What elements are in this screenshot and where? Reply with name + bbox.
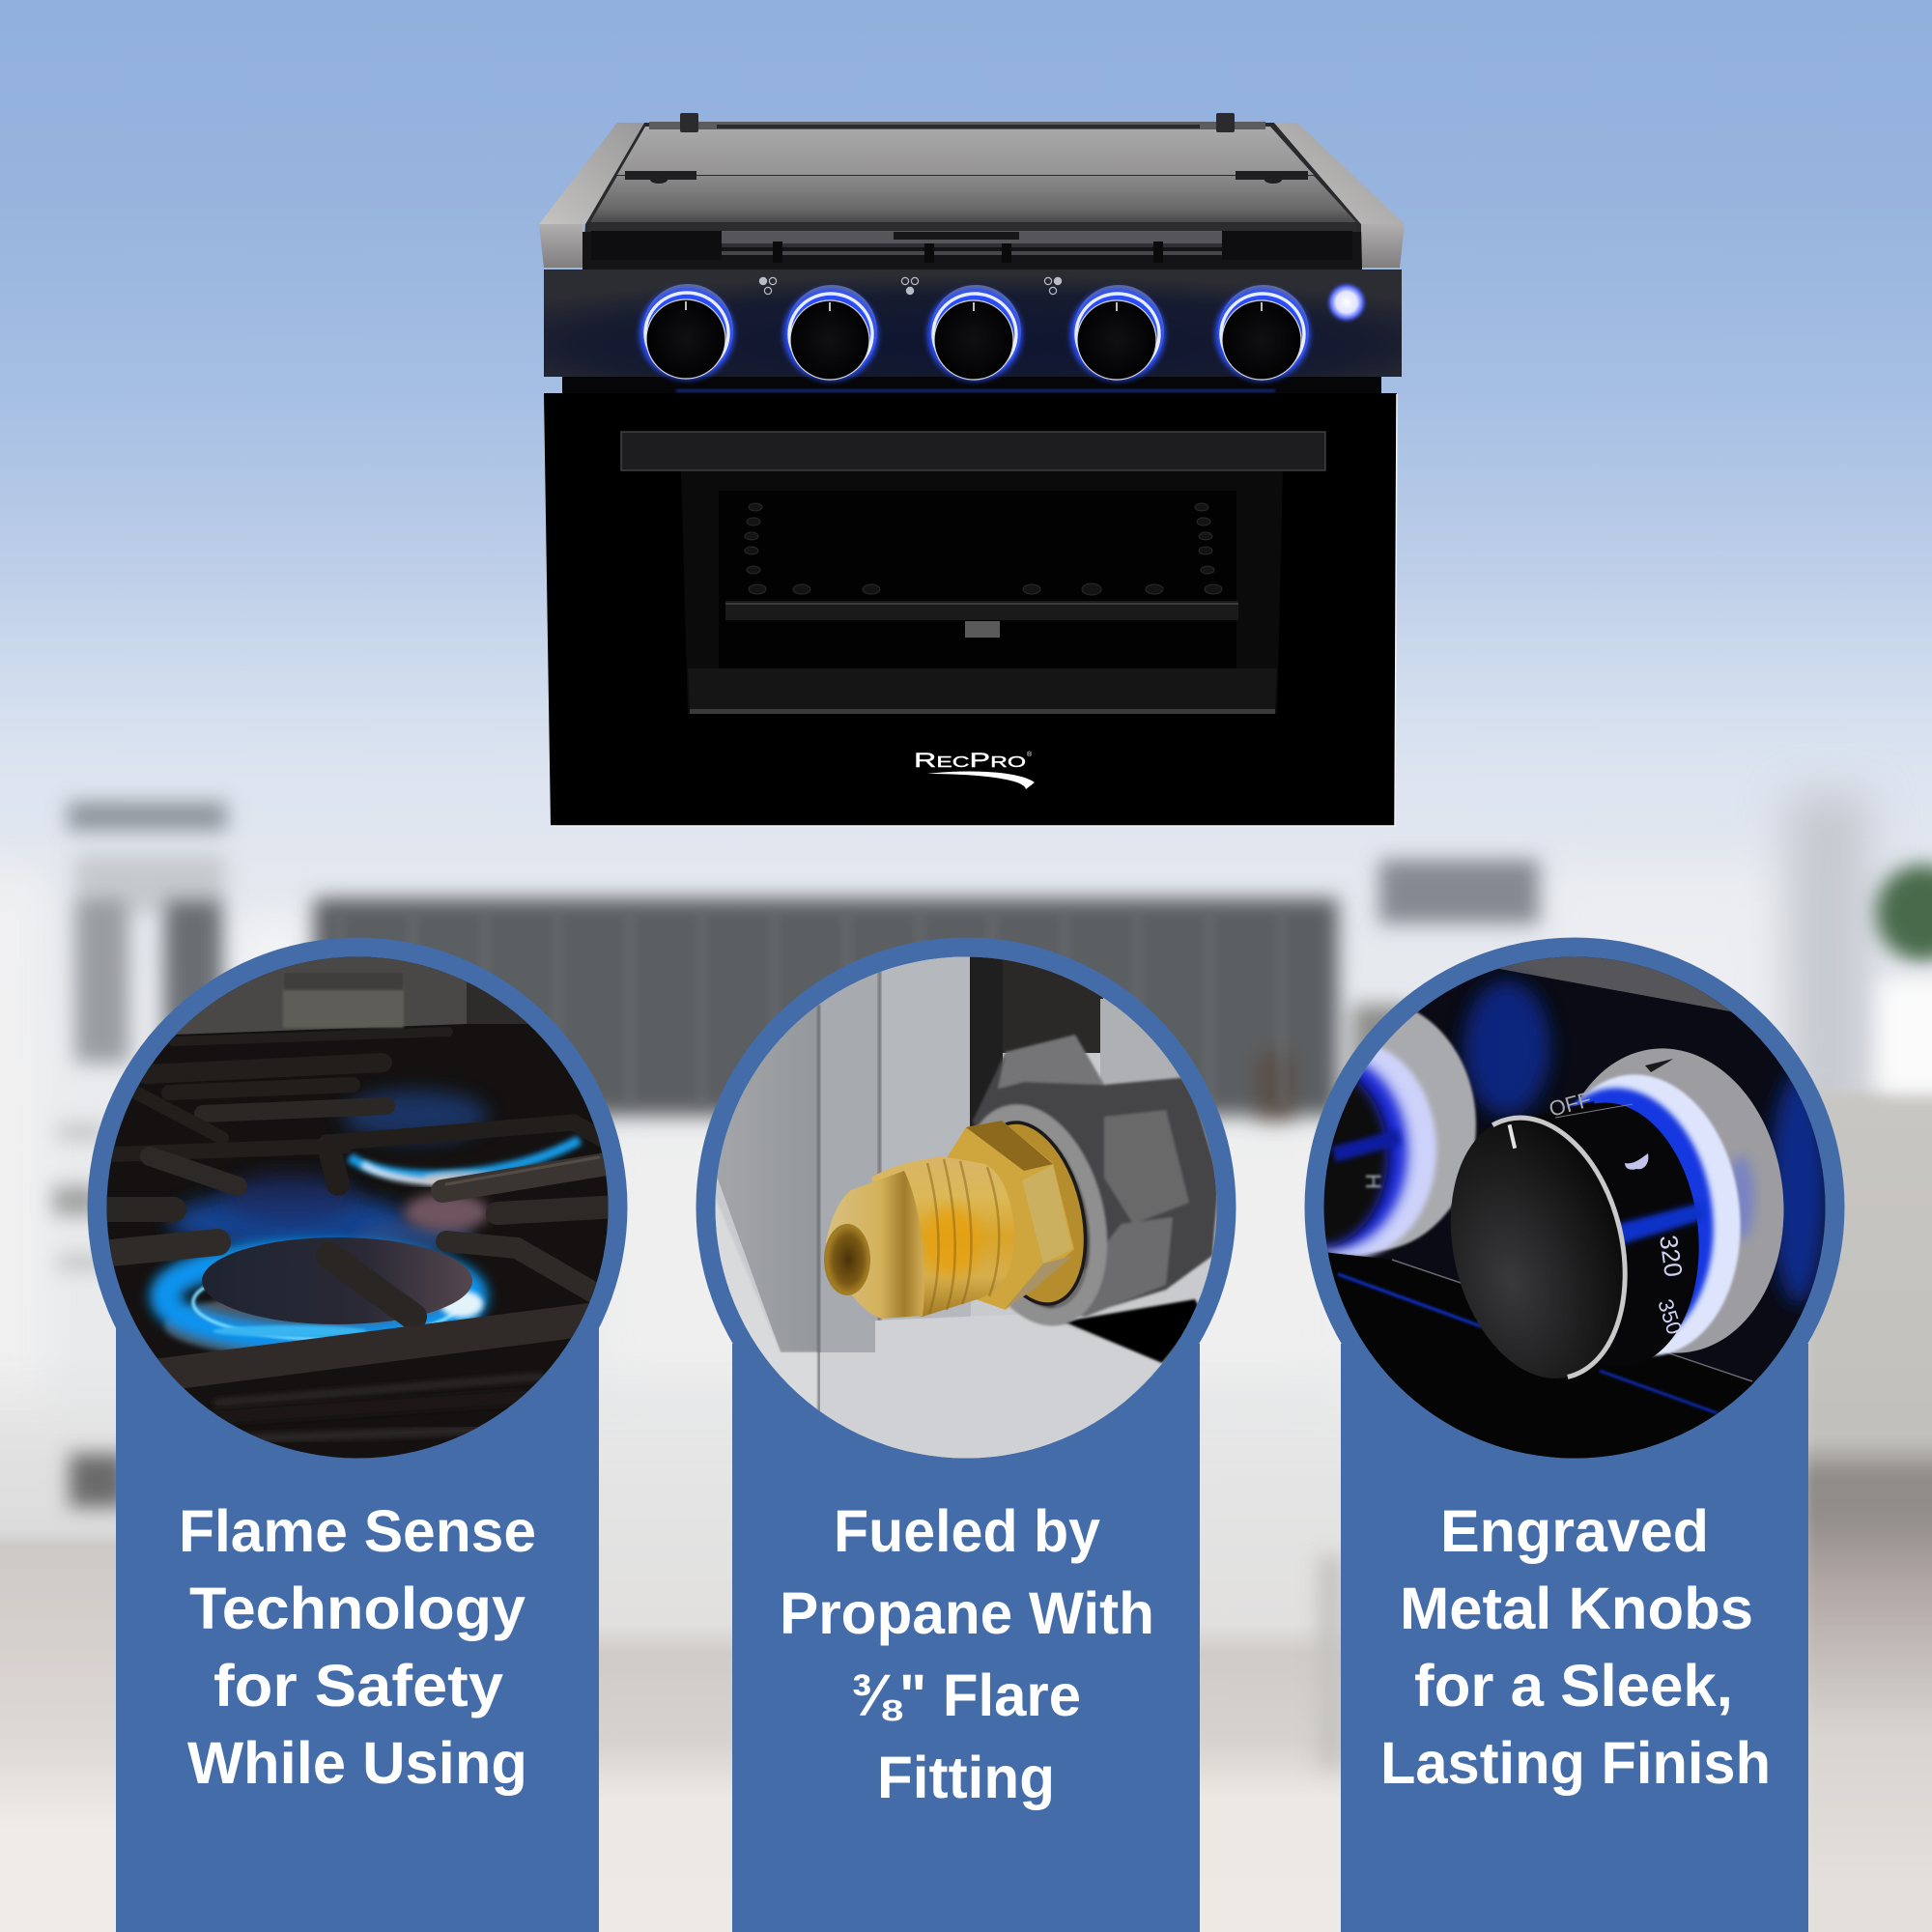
caption: Flame Sense: for Safety [213,1653,503,1719]
flames [164,1091,580,1358]
oven door [544,393,1397,826]
panel shape [87,937,628,1932]
knob face [1426,1100,1650,1396]
caption: Flame Sense: Flame Sense [179,1498,536,1564]
caption: Flame Sense: Technology [189,1576,526,1641]
knob body: 350 [1653,1296,1687,1337]
caption: Engraved knobs [1380,1498,1771,1796]
RecPro logo: R EC P RO [914,750,1026,772]
product: RecPro stove and oven [539,113,1405,826]
knob body: 320 [1654,1234,1689,1279]
panel shape [696,937,1236,1932]
panel shape [1304,937,1845,1932]
caption: Propane fitting: Propane With [780,1580,1154,1646]
caption: Engraved knobs: Metal Knobs [1400,1576,1753,1641]
glow ring [1530,1065,1754,1366]
photo: brass flare fitting [705,947,1227,1468]
cooktop grate [101,1032,618,1439]
caption: Flame Sense: While Using [187,1730,527,1796]
caption: Propane fitting: Fitting [877,1745,1055,1810]
brass nut and seal [947,1121,1088,1310]
stove lid and cooktop [539,113,1405,272]
caption: Engraved knobs: Engraved [1440,1498,1709,1564]
base rail lines [1327,1252,1754,1459]
door handle [621,432,1325,470]
iron valve body [972,1034,1217,1327]
caption: Flame Sense [179,1498,536,1796]
burner cap [202,1237,472,1324]
RecPro logo [914,750,1035,789]
control panel with knobs [544,270,1402,393]
neighbouring knob [1323,1011,1478,1258]
panel 1: Flame Sense [87,937,628,1932]
icon: burner indicators [759,277,1062,295]
caption: Propane fitting: ⅜" Flare [851,1662,1081,1728]
caption: Propane fitting: Fueled by [834,1498,1100,1564]
oven window [681,471,1283,714]
brass flared tip [824,1171,924,1319]
knobs with blue light rings [642,284,1309,380]
photo: illuminated engraved knob [1323,956,1826,1459]
neighbouring knob: H [1361,1174,1385,1189]
caption: Engraved knobs: Lasting Finish [1380,1730,1771,1796]
caption: Propane fitting [780,1498,1154,1810]
photo: gas burner flames [97,947,621,1468]
knob collar [1577,1048,1783,1353]
floor strips [0,1092,1932,1932]
brass threads [871,1156,1014,1317]
knob body: OFF [1547,1087,1594,1122]
caption: Engraved knobs: for a Sleek, [1414,1653,1733,1719]
RecPro logo: ® [1027,751,1033,758]
knob body [1515,1087,1712,1381]
panel 2: Propane fitting [696,937,1236,1932]
icon: power indicator light [1325,281,1368,324]
panel 3: Engraved knobs [1249,937,1845,1932]
